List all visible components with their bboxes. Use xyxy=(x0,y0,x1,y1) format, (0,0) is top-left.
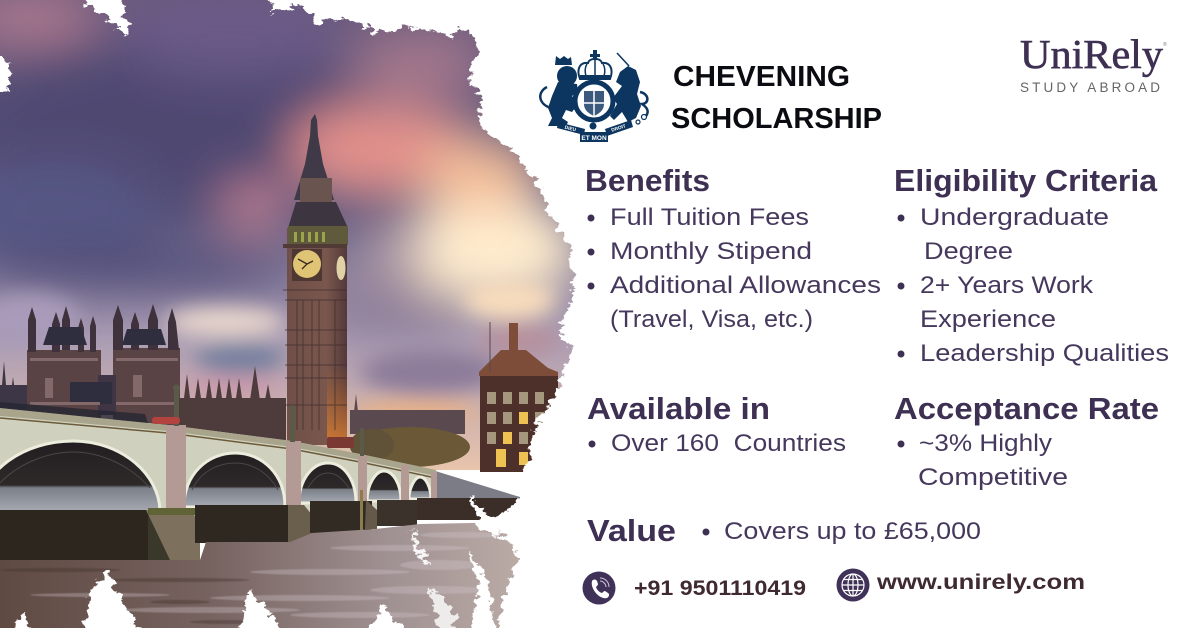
panel: benefits: Benefits xyxy=(585,163,710,198)
panel: value: Value xyxy=(587,513,676,548)
Portcullis House xyxy=(479,322,558,472)
bridge piers xyxy=(166,425,437,510)
panel: benefits: Additional Allowances xyxy=(610,272,881,299)
crest: UK coat of arms xyxy=(540,50,648,142)
icon: phone xyxy=(582,572,616,604)
contact: phone xyxy=(582,572,806,604)
crest motto scroll: ET MON xyxy=(581,135,607,142)
panel: acceptance rate: Competitive xyxy=(918,464,1068,491)
panel: acceptance rate: Acceptance Rate xyxy=(894,391,1159,426)
sunset sky xyxy=(0,0,600,470)
contact: phone: +91 9501110419 xyxy=(634,577,806,600)
panel: eligibility criteria xyxy=(894,163,1169,367)
photo: Big Ben and Westminster Bridge at sunset xyxy=(0,0,600,628)
crest motto scroll: DROIT xyxy=(611,123,627,134)
background trees and buildings xyxy=(350,394,470,467)
logo: UniRely Study Abroad xyxy=(1020,31,1167,95)
crest motto scroll xyxy=(557,120,633,142)
crest unicorn xyxy=(610,53,648,124)
title block with crest xyxy=(540,50,882,142)
river piers xyxy=(0,490,517,560)
crowd on the bridge xyxy=(0,402,148,423)
panel: eligibility criteria: Degree xyxy=(924,238,1013,265)
logo: UniRely Study Abroad: UniRely xyxy=(1020,31,1164,77)
title: Chevening Scholarship: CHEVENING xyxy=(673,61,850,93)
River Thames xyxy=(0,522,520,628)
bridge arches xyxy=(0,441,431,512)
Elizabeth Tower (Big Ben) xyxy=(283,114,348,445)
Westminster Bridge xyxy=(0,384,520,515)
bridge face xyxy=(0,408,436,515)
crest shield and garter xyxy=(575,82,613,120)
panel: eligibility criteria: Eligibility Criteria xyxy=(894,163,1158,198)
panel: eligibility criteria: Undergraduate xyxy=(920,204,1109,231)
street lamps xyxy=(173,384,364,456)
logo: UniRely Study Abroad: ® xyxy=(1163,41,1167,48)
panel: available in xyxy=(587,391,846,457)
panel: eligibility criteria: Experience xyxy=(920,306,1056,333)
contact: website: www.unirely.com xyxy=(876,571,1085,594)
crest lion xyxy=(540,56,578,126)
panel: available in: Over 160 Countries xyxy=(611,430,846,457)
logo: UniRely Study Abroad: STUDY ABROAD xyxy=(1020,80,1160,95)
title: Chevening Scholarship xyxy=(671,61,882,135)
panel: benefits: Full Tuition Fees xyxy=(610,204,809,231)
arch ribs xyxy=(0,452,349,490)
crest crown xyxy=(578,50,612,80)
panel: eligibility criteria: 2+ Years Work xyxy=(920,272,1094,299)
panel: benefits: Monthly Stipend xyxy=(610,238,812,265)
panel: eligibility criteria: Leadership Qualities xyxy=(920,340,1169,367)
contact: website xyxy=(836,568,1085,602)
panel: acceptance rate xyxy=(894,391,1159,491)
Houses of Parliament xyxy=(0,304,286,443)
panel: benefits: (Travel, Visa, etc.) xyxy=(610,306,813,333)
panel: value xyxy=(587,513,981,548)
crest motto scroll: DIEU xyxy=(564,125,577,133)
bridge stair approach xyxy=(436,471,520,499)
icon: globe xyxy=(836,568,870,602)
panel: value: Covers up to £65,000 xyxy=(724,518,981,545)
panel: benefits xyxy=(585,163,881,333)
bridge parapet band xyxy=(0,408,436,476)
red bus and car xyxy=(152,417,180,424)
title: Chevening Scholarship: SCHOLARSHIP xyxy=(671,103,882,135)
panel: acceptance rate: ~3% Highly xyxy=(919,430,1053,457)
panel: available in: Available in xyxy=(587,391,770,426)
